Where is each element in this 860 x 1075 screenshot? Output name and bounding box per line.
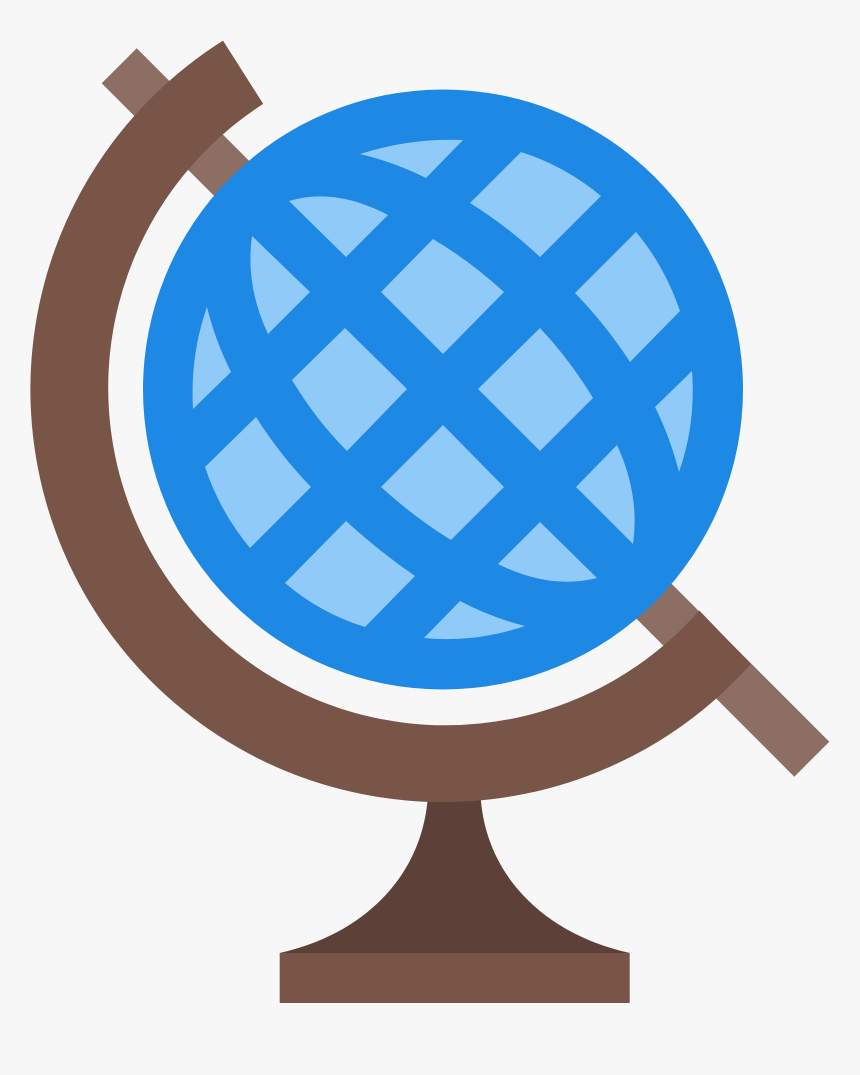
globe land cells xyxy=(193,140,693,639)
globe sphere xyxy=(143,90,743,690)
stand base xyxy=(280,953,630,1003)
meridian arc xyxy=(30,41,751,802)
stand neck xyxy=(280,795,630,953)
axis rod xyxy=(102,48,829,777)
